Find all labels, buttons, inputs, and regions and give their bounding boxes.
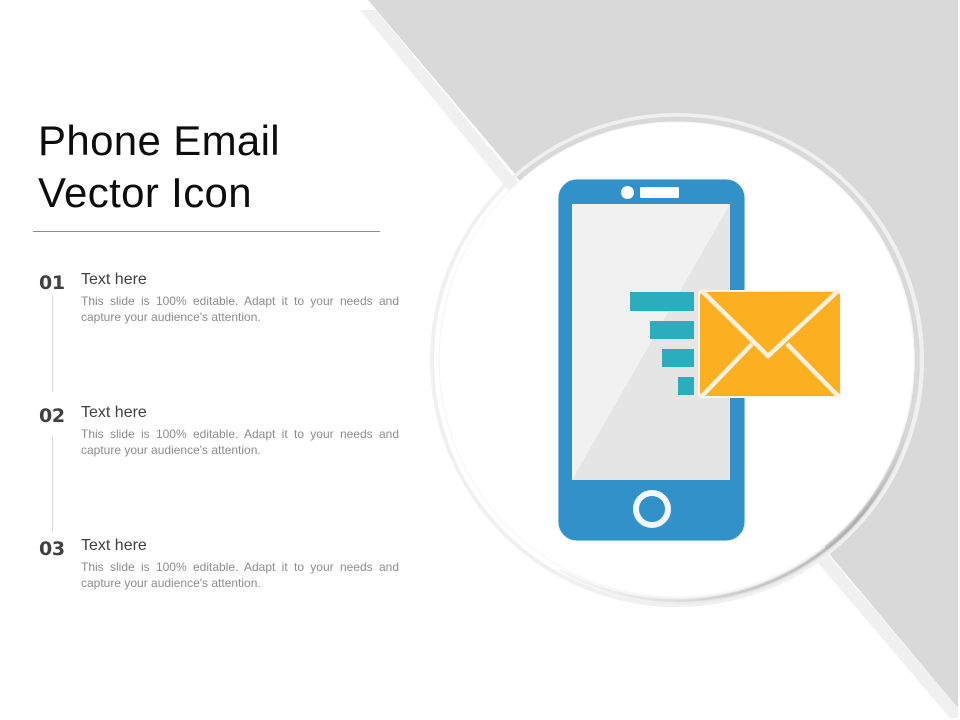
title: Vector Icon: [38, 169, 252, 216]
upper triangle shadow band: [360, 10, 518, 192]
item 02: 02: [39, 405, 65, 427]
title divider: [33, 231, 380, 232]
item 02: Text here: [81, 404, 147, 421]
title: [38, 117, 280, 216]
item 03: This slide is 100% editable. Adapt it to your needs and: [81, 560, 399, 574]
item 03: Text here: [81, 537, 147, 554]
item 02: This slide is 100% editable. Adapt it to your needs and: [81, 427, 399, 441]
screen: [572, 204, 730, 480]
item 03: [39, 537, 399, 590]
item 03: 03: [39, 538, 65, 560]
item 02: capture your audience's attention.: [81, 443, 261, 457]
gray background shape: [368, 0, 958, 708]
circle outer ring: [432, 115, 922, 605]
lower circle shadow: [560, 340, 917, 601]
item 01: Text here: [81, 271, 147, 288]
lower triangle shadow band: [818, 552, 958, 718]
circle inner: [439, 122, 914, 597]
title: Phone Email: [38, 117, 280, 164]
icon: smartphone: [558, 178, 842, 542]
item 01: capture your audience's attention.: [81, 310, 261, 324]
phone body: [558, 179, 745, 541]
screen diagonal shade: [572, 204, 730, 480]
item 01: [39, 271, 399, 392]
item 02: [39, 404, 399, 532]
home button: [636, 493, 668, 525]
motion bars: [630, 292, 694, 395]
item 01: 01: [39, 272, 65, 294]
camera: [621, 186, 634, 199]
item 01: This slide is 100% editable. Adapt it to your needs and: [81, 294, 399, 308]
icon: envelope: [698, 290, 842, 398]
speaker: [640, 187, 679, 198]
upper ring gap: [518, 119, 917, 548]
item 03: capture your audience's attention.: [81, 576, 261, 590]
